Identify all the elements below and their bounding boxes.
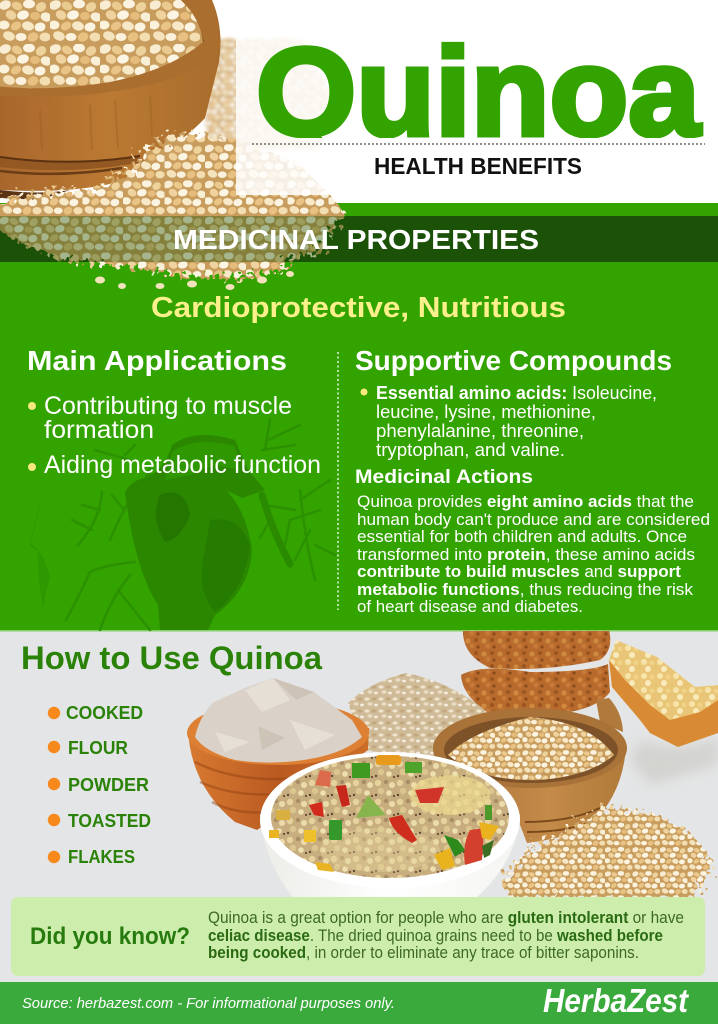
white veil over the header image [236,0,718,195]
application text: Aiding metabolic function [44,451,321,479]
image: quinoa flakes pile [348,673,485,763]
callout text [208,909,684,962]
footer [0,982,718,1024]
list item: powder: POWDER [68,775,149,795]
header background [0,0,718,203]
panel: medicinal properties background [0,203,718,630]
callout text: celiac disease. The dried quinoa grains need to be washed before [208,927,663,945]
callout text: Quinoa is a great option for people who are gluten intolerant or have [208,909,684,927]
application text: Contributing to muscle [44,392,292,420]
title: Quinoa [256,23,702,162]
bullet [28,402,36,410]
logo: HerbaZest: HerbaZest [543,982,690,1019]
list item: flour: FLOUR [68,738,128,758]
column divider [337,352,339,610]
compounds list: Essential amino acids: Isoleucine, [376,383,657,403]
properties line: Cardioprotective, Nutritious [151,292,566,324]
medicinal actions paragraph: of heart disease and diabetes. [357,598,583,616]
callout heading: Did you know? [30,923,190,950]
compounds list [376,383,657,460]
heading: medicinal actions: Medicinal Actions [355,467,533,488]
image: bowl of quinoa flour [187,678,369,830]
image: wooden bowl with quinoa [0,0,220,200]
subtitle: HEALTH BENEFITS [374,153,582,179]
white block above header edge [345,196,718,203]
bullet [360,388,368,396]
panel: supportive compounds [355,345,710,616]
image: quinoa pile bottom right [497,802,717,897]
medicinal actions paragraph: transformed into protein, these amino acids [357,546,695,564]
medicinal actions paragraph: essential for both children and adults. Once [357,528,687,546]
section banner [0,216,718,262]
image: quinoa patties [461,630,718,785]
loose grains below the pile [95,271,294,290]
icon: heart silhouette [30,420,335,630]
medicinal actions paragraph: contribute to build muscles and support [357,563,682,581]
faded quinoa behind the bowl [205,38,330,150]
medicinal actions paragraph [357,493,710,616]
medicinal actions paragraph: metabolic functions , thus reducing the risk [357,581,694,599]
list item: cooked: COOKED [66,703,143,723]
dotted rule under title [252,143,705,145]
callout text: being cooked, in order to eliminate any trace of bitter saponins. [208,944,639,962]
application text continued: formation [44,416,154,444]
panel: how to use quinoa [21,640,323,867]
compounds list: leucine, lysine, methionine, [376,402,596,422]
list item: flakes: FLAKES [68,847,135,867]
banner heading: MEDICINAL PROPERTIES [173,224,539,255]
heading: main applications: Main Applications [27,345,287,376]
green top edge of how to use panel [0,630,718,632]
compounds list: tryptophan, and valine. [376,440,565,460]
source line: Source: herbazest.com - For informational purposes only. [22,995,395,1012]
image: white bowl of quinoa salad [260,752,520,897]
medicinal actions paragraph: Quinoa provides eight amino acids that the [357,493,694,511]
heading: supportive compounds: Supportive Compounds [355,345,672,376]
compounds list: phenylalanine, threonine, [376,421,584,441]
bullet [28,463,36,471]
callout: did you know [11,897,705,976]
image: wooden bowl of quinoa [433,708,627,843]
medicinal actions paragraph: human body can't produce and are considered [357,511,710,529]
panel: main applications [27,345,321,479]
list item: toasted: TOASTED [68,811,151,831]
chopped vegetables [269,755,499,872]
image: quinoa pile [0,130,346,285]
panel: how to use background [0,630,718,982]
heading: how to use: How to Use Quinoa [21,640,323,676]
